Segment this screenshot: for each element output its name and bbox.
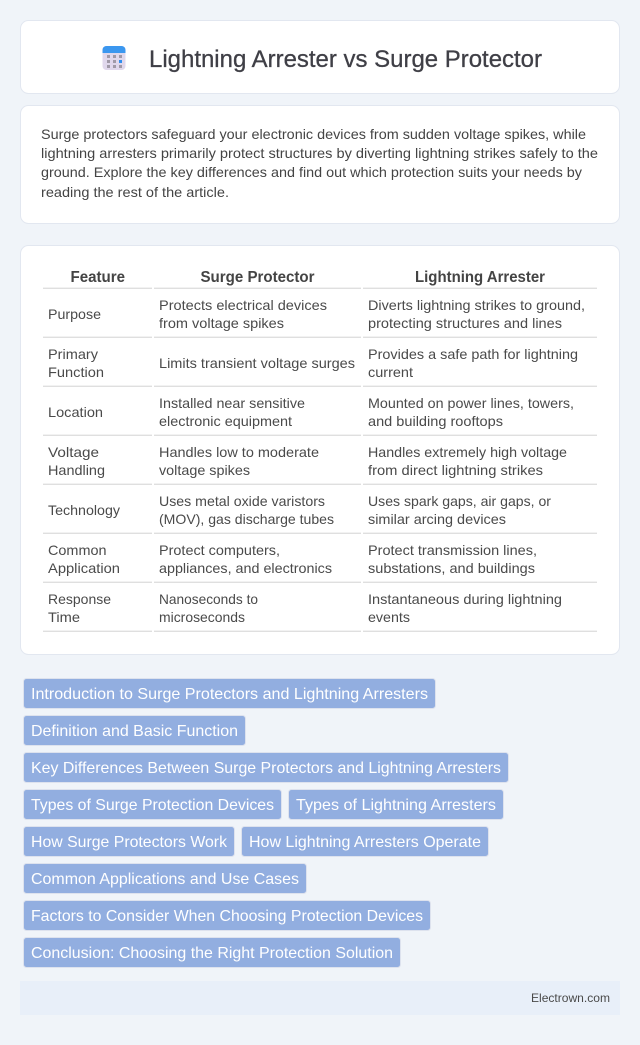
row: voltage handling (48, 444, 567, 478)
row: common application: Protect transmission lines, (368, 542, 537, 558)
tag (24, 900, 430, 930)
row: primary function: Function (48, 364, 104, 380)
row: primary function (48, 346, 578, 380)
tag (242, 826, 488, 856)
tag (24, 938, 400, 968)
icon: calendar (102, 46, 126, 70)
row: location: Location (48, 404, 103, 420)
tag: Factors to Consider When Choosing Protection Devices (31, 908, 423, 925)
tag: Introduction to Surge Protectors and Lightning Arresters (31, 686, 428, 703)
tag (24, 790, 282, 820)
panel: intro text: ground. Explore the key differences and find out which protection suits your needs by (41, 164, 582, 180)
row: common application: Application (48, 560, 120, 576)
row: response time: Response (48, 591, 111, 607)
row: location: Installed near sensitive (159, 395, 305, 411)
row: primary function: current (368, 364, 413, 380)
panel: intro text: Surge protectors safeguard your electronic devices from sudden voltage spikes, while (41, 126, 586, 142)
tag: How Lightning Arresters Operate (249, 834, 481, 851)
panel: intro text (20, 106, 620, 224)
row: response time: Instantaneous during lightning (368, 591, 562, 607)
row: voltage handling: voltage spikes (159, 462, 250, 478)
row: voltage handling: Voltage (48, 444, 99, 460)
row: location: and building rooftops (368, 413, 503, 429)
row: common application: substations, and buildings (368, 560, 535, 576)
row: purpose (48, 297, 585, 331)
row: purpose: Diverts lightning strikes to ground, (368, 297, 585, 313)
row: voltage handling: Handles extremely high voltage (368, 444, 567, 460)
tag (24, 864, 306, 894)
row: response time (48, 591, 562, 625)
tag: Conclusion: Choosing the Right Protection Solution (31, 945, 393, 962)
row: location: Mounted on power lines, towers, (368, 395, 574, 411)
tag (24, 752, 508, 782)
table header: Feature (70, 269, 125, 286)
row: technology (48, 493, 551, 527)
row: response time: microseconds (159, 609, 245, 625)
row: technology: Uses spark gaps, air gaps, or (368, 493, 551, 509)
tag: How Surge Protectors Work (31, 834, 228, 851)
row: common application: Protect computers, (159, 542, 280, 558)
row: technology: (MOV), gas discharge tubes (159, 511, 334, 527)
tag (24, 678, 436, 708)
row: technology: Technology (48, 502, 120, 518)
table header (70, 269, 545, 286)
tag (24, 716, 246, 746)
row: primary function: Provides a safe path for lightning (368, 346, 578, 362)
row: common application: appliances, and electronics (159, 560, 332, 576)
footer (20, 981, 620, 1015)
panel: comparison table (20, 246, 620, 654)
row: primary function: Limits transient voltage surges (159, 355, 355, 371)
row: common application: Common (48, 542, 106, 558)
footer: Electrown.com (531, 991, 610, 1005)
row: response time: events (368, 609, 410, 625)
row: purpose: Purpose (48, 306, 101, 322)
tag (288, 790, 504, 820)
row: voltage handling: Handling (48, 462, 105, 478)
title: Lightning Arrester vs Surge Protector (149, 46, 542, 73)
panel: table of contents tags (24, 678, 508, 968)
row: purpose: protecting structures and lines (368, 315, 562, 331)
row: voltage handling: Handles low to moderate (159, 444, 319, 460)
row: purpose: Protects electrical devices (159, 297, 327, 313)
row: common application (48, 542, 537, 576)
tag: Types of Surge Protection Devices (31, 797, 274, 814)
row: location (48, 395, 574, 429)
row: response time: Nanoseconds to (159, 591, 258, 607)
row: response time: Time (48, 609, 80, 625)
tag (24, 826, 234, 856)
table header: Lightning Arrester (415, 269, 545, 286)
row: location: electronic equipment (159, 413, 292, 429)
row: purpose: from voltage spikes (159, 315, 284, 331)
row: primary function: Primary (48, 346, 98, 362)
tag: Key Differences Between Surge Protectors and Lightning Arresters (31, 760, 501, 777)
row: technology: Uses metal oxide varistors (159, 493, 325, 509)
row: technology: similar arcing devices (368, 511, 506, 527)
table header: Surge Protector (200, 269, 314, 286)
panel: intro text: reading the rest of the article. (41, 184, 229, 200)
panel: intro text: lightning arresters primarily protect structures by diverting lightning strikes safely to the (41, 145, 598, 161)
tag: Definition and Basic Function (31, 723, 238, 740)
panel: title card (20, 20, 620, 94)
tag: Types of Lightning Arresters (296, 797, 496, 814)
tag: Common Applications and Use Cases (31, 871, 299, 888)
row: voltage handling: from direct lightning strikes (368, 462, 543, 478)
